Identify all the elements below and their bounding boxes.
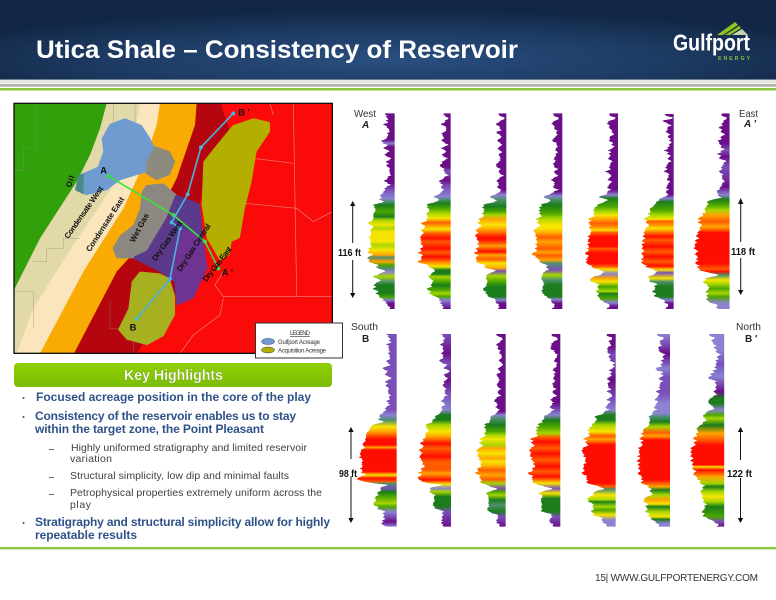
log B7 [690,334,724,527]
map border [14,103,332,353]
map labels: Dry Gas West [150,219,185,263]
label: South B [351,321,378,345]
arrow: 118 ft: 118 ft [731,247,756,258]
bullet 3: repeatable results [35,528,137,542]
section line B-B' [135,111,235,321]
map labels: Condensate East [84,195,126,253]
title: Utica Shale – Consistency of Reservoir [36,36,518,64]
logo: Gulfport Energy [673,22,751,62]
log A5 [585,113,618,309]
map labels: Oil [64,174,76,189]
label: North B': B ' [745,334,757,345]
log A4 [531,113,562,309]
region: acquisition acreage south [120,274,173,343]
legend [256,323,342,358]
log A6 [641,114,674,309]
legend item: Gulfport acreage: Gulfport Acreage [278,340,321,346]
sub bullet 1: variation [70,453,112,465]
arrow: 98 ft: 98 ft [339,469,358,480]
footer: page number and website: 15| WWW.GULFPORTENERGY.COM [595,573,758,584]
log B4 [528,334,560,527]
map labels: A ' [222,267,233,277]
legend heading: LEGEND [290,331,311,337]
region: overlap grey north [147,148,173,178]
well logs: south to north [356,334,731,527]
log A7 [694,113,730,309]
log A3 [474,113,506,309]
sub bullet 1: Highly uniformed stratigraphy and limited reservoir [71,442,308,454]
label: East A': A ' [743,119,757,130]
well logs: west to east [367,113,736,309]
sub bullet 2: Structural simplicity, low dip and minimal faults [70,470,289,482]
county lines [14,103,332,353]
label: East A': East [739,108,758,120]
bullet 2 [22,409,296,436]
logo wordmark: Gulfport [673,30,750,56]
text block: highlights [22,390,330,542]
label: West A [354,108,376,131]
log B6 [636,334,670,527]
map labels: A [100,166,107,176]
sub bullet 3: Petrophysical properties extremely uniform across the [70,487,322,499]
overlap on oil [75,173,84,194]
label: South B: B [362,334,369,345]
arrow: 122 ft: 122 ft [727,469,753,480]
label: North B' [736,321,761,345]
arrow: 98 ft [339,427,358,523]
bullet 3 [22,515,330,542]
map labels: Dry Gas East [201,245,234,283]
header banner [0,0,776,90]
logo icon: green chevrons [717,22,748,35]
sub bullet 3 [49,487,322,511]
label: West A: West [354,108,376,120]
label: North B': North [736,321,761,333]
bullet 2: within the target zone, the Point Pleasant [34,422,264,436]
log B5 [581,334,616,527]
log B3 [475,334,506,527]
map labels: B [130,323,137,333]
panel: acreage map [14,103,332,353]
region: acquisition acreage north [204,120,268,258]
map labels: Dry Gas Central [175,222,213,273]
label: South B: South [351,321,378,333]
arrow: 116 ft: 116 ft [338,248,362,259]
legend item: acquisition acreage: Acquisition Acreage [278,348,327,354]
log A1 [367,113,395,309]
bullet 2: Consistency of the reservoir enables us to stay [35,409,296,423]
region: Gulfport acreage north [77,120,152,193]
label: East A' [739,108,758,130]
sub bullet 3: play [70,499,92,511]
arrow: 116 ft [338,201,362,298]
arrow: 122 ft [727,427,753,523]
logo subtitle: ENERGY [718,56,751,62]
map labels: B ' [238,108,250,118]
region: dry gas acreage [136,197,205,303]
log B1 [356,334,397,527]
map labels: Condensate West [63,184,106,240]
label: West A: A [361,120,369,131]
map labels: Wet Gas [128,211,151,244]
log A2 [419,113,457,309]
sub bullet 1 [49,442,308,465]
panel: key highlights heading: Key Highlights [124,368,223,384]
region: oil window [14,103,107,290]
arrow: 118 ft [731,198,756,295]
section line A-A' [106,174,220,270]
region: wet gas acreage [115,185,175,256]
bullet 1: Focused acreage position in the core of the play [36,390,311,404]
log B2 [418,334,451,527]
panel: key highlights heading [14,363,332,387]
map labels [63,108,250,333]
bullet 3: Stratigraphy and structural simplicity allow for highly [35,515,330,529]
